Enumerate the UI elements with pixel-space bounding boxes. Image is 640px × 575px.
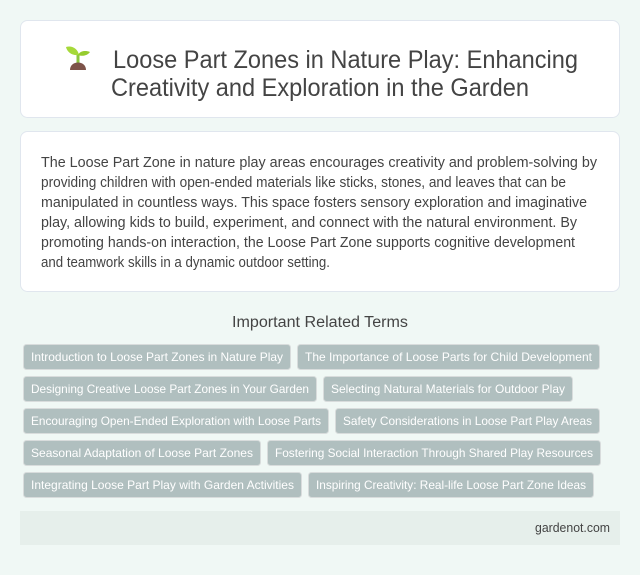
description text: and teamwork skills in a dynamic outdoor setting. (41, 255, 330, 271)
panel: description (20, 132, 620, 292)
tag: Fostering Social Interaction Through Shared Play Resources (275, 446, 593, 460)
tag: Introduction to Loose Part Zones in Nature Play (31, 350, 283, 364)
tag (324, 376, 572, 402)
tag (24, 440, 260, 466)
tag: Encouraging Open-Ended Exploration with Loose Parts (31, 414, 321, 428)
tag (308, 472, 594, 498)
tag (24, 376, 316, 402)
tag: Selecting Natural Materials for Outdoor Play (331, 382, 565, 396)
icon: seedling (66, 46, 90, 70)
tag: Designing Creative Loose Part Zones in Your Garden (31, 382, 309, 396)
footer (20, 511, 620, 545)
tag (24, 408, 328, 434)
heading: important related terms: Important Related Terms (232, 314, 408, 331)
tag: The Importance of Loose Parts for Child Development (305, 350, 593, 364)
description text: The Loose Part Zone in nature play areas encourages creativity and problem-solving by (41, 155, 598, 171)
tag (268, 440, 600, 466)
footer site name: gardenot.com (535, 521, 610, 535)
title: Creativity and Exploration in the Garden (111, 74, 529, 102)
tag (24, 472, 302, 498)
tag: Inspiring Creativity: Real-life Loose Part Zone Ideas (316, 478, 586, 492)
tag: Safety Considerations in Loose Part Play Areas (343, 414, 592, 428)
tag (24, 344, 290, 370)
tag: Integrating Loose Part Play with Garden Activities (31, 478, 294, 492)
tag: Seasonal Adaptation of Loose Part Zones (31, 446, 253, 460)
header panel (20, 20, 620, 118)
title: Loose Part Zones in Nature Play: Enhancing (113, 46, 578, 74)
description text: providing children with open-ended materials like sticks, stones, and leaves that can be (41, 175, 566, 191)
related terms tags (24, 344, 600, 498)
description text: play, allowing kids to build, experiment, and connect with the natural environment. By (41, 215, 578, 231)
tag (298, 344, 600, 370)
tag (336, 408, 600, 434)
title (111, 46, 578, 102)
description text (41, 155, 598, 271)
description text: promoting hands-on interaction, the Loose Part Zone supports cognitive development (41, 235, 575, 251)
description text: manipulated in countless ways. This space fosters sensory exploration and imaginative (41, 195, 587, 211)
